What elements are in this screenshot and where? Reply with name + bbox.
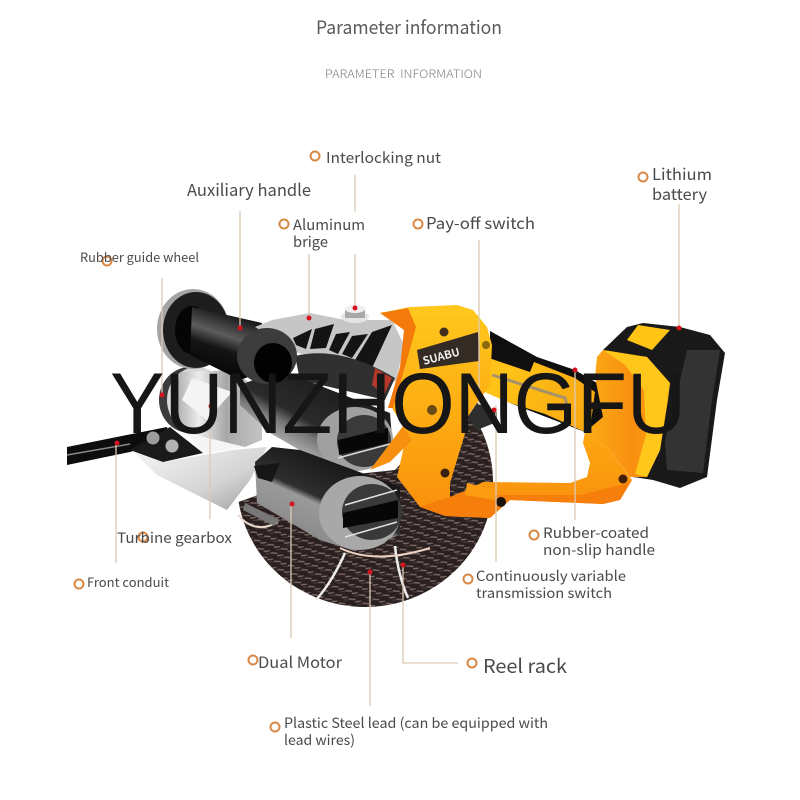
auxiliary handle bbox=[157, 289, 262, 380]
product illustration: wire threading machine bbox=[67, 289, 725, 607]
lower grip shadow bbox=[467, 403, 497, 430]
label: front conduit: Front conduit bbox=[87, 572, 169, 591]
label: aluminum bridge bbox=[280, 214, 365, 252]
battery mount bbox=[585, 350, 670, 477]
aluminum bridge bbox=[255, 313, 404, 400]
label: lithium battery: battery bbox=[652, 181, 708, 205]
label: auxiliary handle: Auxiliary handle bbox=[187, 177, 311, 201]
label: aluminum bridge: brige bbox=[293, 231, 328, 252]
label: rubber-coated handle: non-slip handle bbox=[543, 539, 655, 560]
label: aluminum bridge: Aluminum bbox=[293, 214, 365, 235]
yellow body and frame bbox=[370, 305, 632, 518]
label: lithium battery bbox=[638, 161, 712, 205]
label: rubber guide wheel: Rubber guide wheel bbox=[80, 247, 199, 266]
upper motor bbox=[240, 372, 393, 471]
label: turbine gearbox: Turbine gearbox bbox=[117, 527, 232, 548]
rubber guide wheel bbox=[159, 367, 227, 433]
label: plastic steel lead: lead wires) bbox=[284, 730, 355, 750]
label: pay-off switch: Pay-off switch bbox=[426, 210, 535, 234]
battery bbox=[600, 323, 725, 488]
watermark: YUNZHONGFU bbox=[110, 356, 686, 452]
label: reel rack: Reel rack bbox=[483, 652, 568, 679]
label: rubber-coated handle: Rubber-coated bbox=[543, 522, 649, 543]
label: dual motor: Dual Motor bbox=[258, 651, 343, 673]
label: transmission switch bbox=[464, 566, 626, 603]
label: interlocking nut: Interlocking nut bbox=[326, 147, 441, 168]
callout dots bbox=[114, 306, 682, 574]
label: plastic steel lead: Plastic Steel lead (can be equipped with bbox=[284, 713, 548, 733]
label: lithium battery: Lithium bbox=[652, 161, 712, 185]
label: plastic steel lead bbox=[270, 713, 548, 750]
label: transmission switch: transmission switch bbox=[476, 583, 612, 603]
front conduit bbox=[67, 427, 170, 465]
title: Parameter information bbox=[316, 14, 502, 40]
turbine gearbox bbox=[130, 370, 267, 510]
label: transmission switch: Continuously variable bbox=[476, 566, 626, 586]
interlocking nut bbox=[341, 305, 369, 323]
leader lines bbox=[116, 175, 679, 706]
infographic canvas bbox=[66, 19, 725, 748]
lower motor bbox=[243, 447, 402, 551]
subtitle: PARAMETER INFORMATION bbox=[325, 66, 482, 82]
yellow body and frame: SUABU bbox=[421, 344, 461, 369]
handle front end bbox=[237, 328, 297, 384]
wire reel bbox=[237, 420, 493, 607]
label: rubber-coated handle bbox=[530, 522, 655, 560]
rubber-coated handle grip bbox=[480, 331, 606, 432]
